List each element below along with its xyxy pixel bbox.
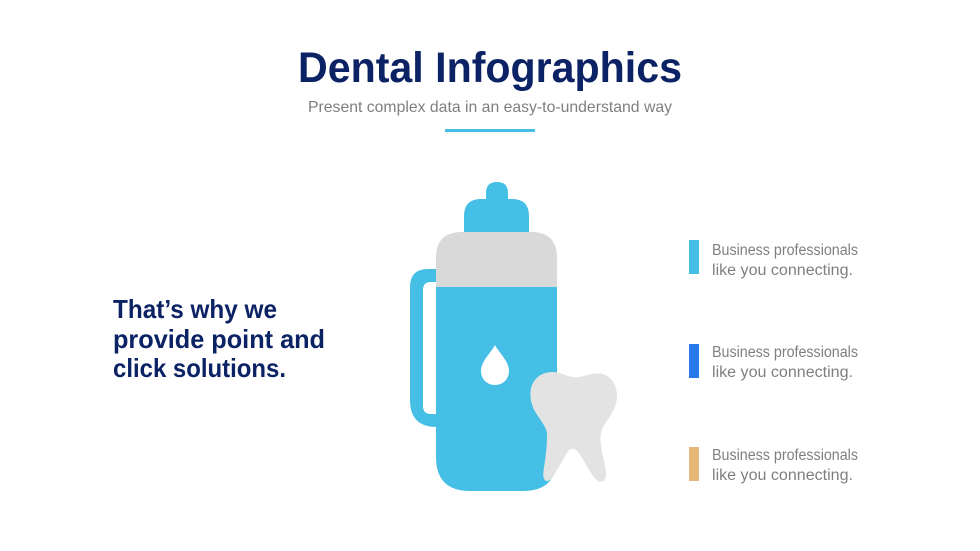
left statement text: click solutions. xyxy=(113,353,286,383)
title underline xyxy=(445,129,535,132)
item text: like you connecting. xyxy=(712,467,853,484)
bottle handle xyxy=(410,269,437,427)
list item 2 xyxy=(689,344,858,381)
list item 1 xyxy=(689,240,858,279)
item text: like you connecting. xyxy=(712,262,853,279)
item text: Business professionals xyxy=(712,447,858,464)
subtitle: Present complex data in an easy-to-understand way xyxy=(308,99,672,116)
title: Dental Infographics xyxy=(298,44,682,92)
left statement text xyxy=(113,294,325,383)
item text: like you connecting. xyxy=(712,364,853,381)
marker: light blue xyxy=(689,240,699,274)
item text: Business professionals xyxy=(712,242,858,259)
left statement text: provide point and xyxy=(113,324,325,354)
icon: tooth xyxy=(530,372,617,482)
icon: bottle with tooth xyxy=(410,182,617,491)
marker: tan xyxy=(689,447,699,481)
bottle body xyxy=(436,287,557,491)
icon: water drop xyxy=(481,345,509,385)
bottle shoulder xyxy=(436,232,557,287)
left statement text: That’s why we xyxy=(113,294,277,324)
list item 3 xyxy=(689,447,858,484)
bottle nipple and cap xyxy=(464,182,529,233)
marker: blue xyxy=(689,344,699,378)
item text: Business professionals xyxy=(712,344,858,361)
